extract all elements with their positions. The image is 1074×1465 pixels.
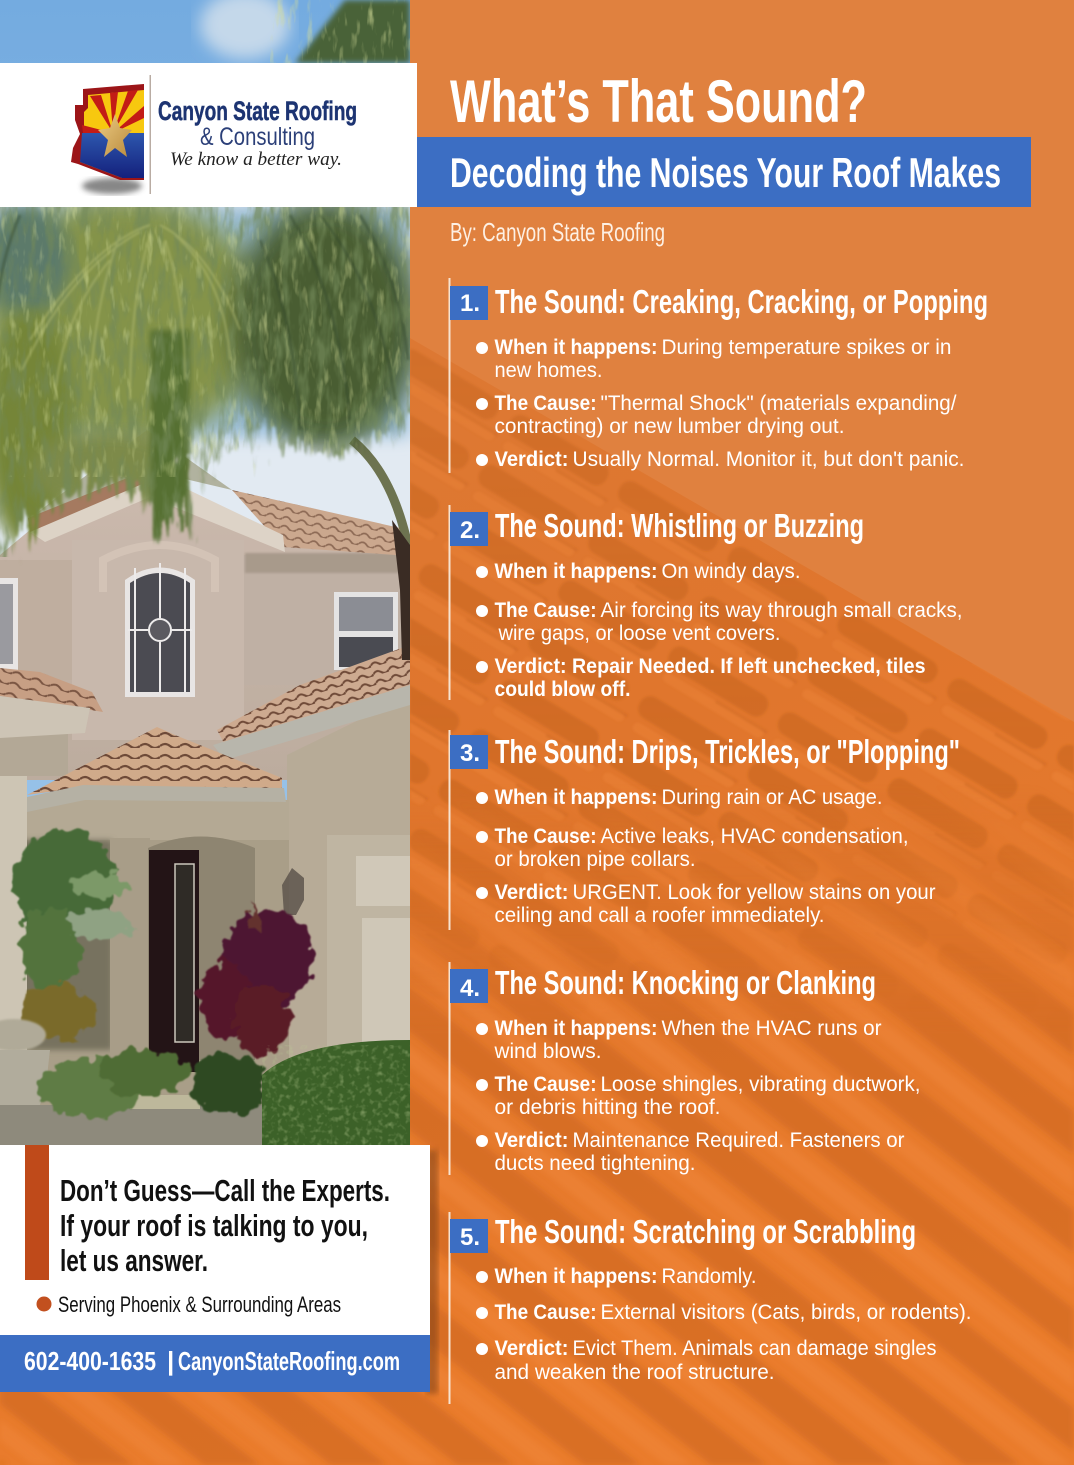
contact bar: CanyonStateRoofing.com xyxy=(178,1346,400,1376)
call to action text: Don’t Guess—Call the Experts. xyxy=(60,1173,390,1208)
photo: house with palm trees xyxy=(0,0,420,1145)
bullet: when it happens: When it happens: xyxy=(494,335,658,359)
bullet: when it happens xyxy=(476,1016,882,1063)
bullet: the cause: External visitors (Cats, birds, or rodents). xyxy=(600,1300,972,1324)
bullet: the cause: The Cause: xyxy=(494,391,596,415)
bullet: when it happens: When the HVAC runs or xyxy=(662,1016,882,1040)
shrub xyxy=(20,984,96,1040)
service area: Serving Phoenix & Surrounding Areas xyxy=(58,1292,341,1317)
subtitle banner xyxy=(417,137,1031,207)
red plant xyxy=(200,900,314,1055)
bullet: the cause xyxy=(476,391,957,438)
bullet: verdict xyxy=(476,1128,904,1175)
ground xyxy=(0,1095,275,1145)
window: center arched xyxy=(125,563,195,697)
bullet: verdict: Usually Normal. Monitor it, but don't panic. xyxy=(572,447,964,471)
bullet: verdict: Evict Them. Animals can damage singles xyxy=(572,1336,936,1360)
bullet: when it happens: During temperature spikes or in xyxy=(662,335,952,359)
bullet: the cause: The Cause: xyxy=(494,1300,596,1324)
left roof xyxy=(0,668,103,738)
number badge 2: 2. xyxy=(460,517,480,544)
orange background xyxy=(0,338,1074,1465)
bullet: verdict xyxy=(476,880,936,927)
bullet: when it happens xyxy=(476,1264,756,1288)
bullet: when it happens: On windy days. xyxy=(662,559,800,583)
urn xyxy=(0,1018,50,1105)
gable roof xyxy=(28,430,410,556)
bullet: when it happens: Randomly. xyxy=(662,1264,756,1288)
call to action text: let us answer. xyxy=(60,1243,208,1278)
panel: sound 2 xyxy=(448,505,962,701)
bullet: the cause: The Cause: xyxy=(494,598,596,622)
bullet: when it happens: When it happens: xyxy=(494,1264,658,1288)
bullet: the cause xyxy=(476,598,962,645)
palm foliage xyxy=(0,195,420,660)
number badge 4 xyxy=(450,969,488,1003)
logo wordmark: & Consulting xyxy=(200,123,315,151)
call to action text xyxy=(60,1173,390,1278)
garage door xyxy=(327,835,410,1060)
panel: sound 4 xyxy=(448,962,920,1175)
bullet: verdict: Maintenance Required. Fasteners or xyxy=(572,1128,904,1152)
panel: sound 3 xyxy=(448,730,960,930)
window: left xyxy=(0,578,18,670)
wall lantern xyxy=(282,868,304,915)
number badge 1: 1. xyxy=(460,290,480,317)
number badge 3 xyxy=(450,735,488,769)
bullet: when it happens: new homes. xyxy=(494,358,602,382)
bullet: the cause: Loose shingles, vibrating ductwork, xyxy=(600,1072,920,1096)
logo divider xyxy=(150,75,151,194)
number badge 1 xyxy=(450,286,488,320)
logo wordmark: Canyon State Roofing xyxy=(158,96,357,126)
bullet: verdict xyxy=(476,654,926,701)
bullet: verdict: Verdict: xyxy=(494,1336,568,1360)
porch roof xyxy=(27,727,286,812)
bullet: verdict: Verdict: xyxy=(494,447,568,471)
heading 5: The Sound: Scratching or Scrabbling xyxy=(495,1213,916,1250)
bullet: the cause: Active leaks, HVAC condensation, xyxy=(600,824,908,848)
contact bar xyxy=(0,1335,430,1392)
call to action text: If your roof is talking to you, xyxy=(60,1208,368,1243)
window: right xyxy=(334,592,398,670)
byline: By: Canyon State Roofing xyxy=(450,217,665,247)
number badge 4: 4. xyxy=(460,975,480,1002)
bullet: the cause xyxy=(476,1072,920,1119)
bullet: when it happens: During rain or AC usage. xyxy=(662,785,882,809)
bullet: verdict: ducts need tightening. xyxy=(494,1151,696,1175)
title: What’s That Sound? xyxy=(450,68,867,135)
bullet: when it happens: When it happens: xyxy=(494,785,658,809)
logo wordmark xyxy=(158,96,357,170)
bullet: verdict: Verdict: xyxy=(494,880,568,904)
bullet: the cause: Air forcing its way through small cracks, xyxy=(600,598,962,622)
bullet: the cause: contracting) or new lumber drying out. xyxy=(494,414,844,438)
panel: sound 1 xyxy=(448,278,988,473)
bullet: when it happens: wind blows. xyxy=(494,1039,602,1063)
accent bar xyxy=(25,1145,49,1280)
bullet: the cause: or broken pipe collars. xyxy=(494,847,696,871)
number badge 5: 5. xyxy=(460,1224,480,1251)
icon: gold star xyxy=(98,114,132,157)
bushes xyxy=(38,1040,410,1145)
bullet: the cause: wire gaps, or loose vent covers. xyxy=(498,621,780,645)
bullet: the cause: or debris hitting the roof. xyxy=(494,1095,720,1119)
bullet: the cause: The Cause: xyxy=(494,824,596,848)
number badge 5 xyxy=(450,1219,488,1253)
bullet: when it happens: When it happens: xyxy=(494,1016,658,1040)
bullet: verdict: and weaken the roof structure. xyxy=(494,1360,774,1384)
bullet: when it happens xyxy=(476,559,800,583)
wall upper xyxy=(0,498,382,780)
logo panel xyxy=(0,63,417,207)
call to action panel xyxy=(0,1145,438,1394)
bullet: verdict: could blow off. xyxy=(494,677,630,701)
bullet: the cause xyxy=(476,824,908,871)
contact bar: | xyxy=(167,1346,174,1376)
bullet: when it happens xyxy=(476,785,882,809)
bullet: the cause: The Cause: xyxy=(494,1072,596,1096)
bullet: verdict: URGENT. Look for yellow stains on your xyxy=(572,880,936,904)
bullet: when it happens: When it happens: xyxy=(494,559,658,583)
panel: sound 5 xyxy=(448,1212,972,1404)
bullet: the cause: "Thermal Shock" (materials expanding/ xyxy=(600,391,957,415)
bullet: verdict: Verdict: Repair Needed. If left unchecked, tiles xyxy=(494,654,926,678)
door xyxy=(149,850,199,1072)
icon: Arizona state logo xyxy=(71,84,144,194)
heading 4: The Sound: Knocking or Clanking xyxy=(495,964,876,1001)
roof texture xyxy=(0,330,1074,1465)
contact bar: 602-400-1635 xyxy=(24,1346,156,1376)
lower right wall xyxy=(287,695,410,1060)
logo wordmark: We know a better way. xyxy=(170,149,342,170)
number badge 3: 3. xyxy=(460,740,480,767)
bullet: verdict: Verdict: xyxy=(494,1128,568,1152)
left column xyxy=(0,776,27,1050)
bullet: verdict xyxy=(476,1336,936,1384)
heading 2: The Sound: Whistling or Buzzing xyxy=(495,507,864,544)
bullet: verdict: ceiling and call a roofer immediately. xyxy=(494,903,824,927)
porch walls xyxy=(27,840,289,1105)
lower right roof xyxy=(213,645,410,760)
bullet: when it happens xyxy=(476,335,952,382)
green tree xyxy=(13,830,132,995)
number badge 2 xyxy=(450,512,488,546)
